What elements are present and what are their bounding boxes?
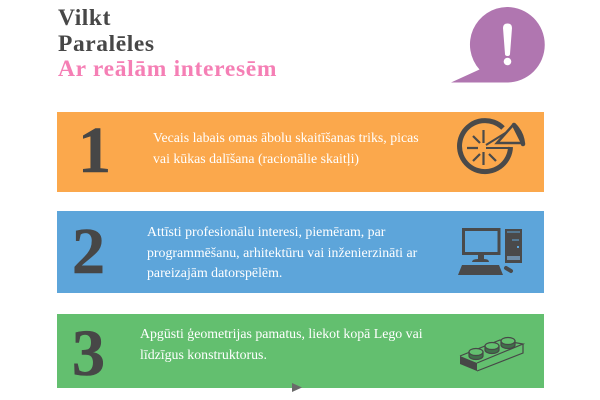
- icon: pizza: [457, 118, 526, 174]
- text: step 3 description: Apgūsti ģeometrijas pamatus, liekot kopā Lego vai: [140, 326, 423, 341]
- text: step 2 description: pareizajām datorspēlēm.: [147, 265, 282, 280]
- text: step 3 description: [140, 326, 423, 362]
- panel: step 1: [57, 112, 544, 192]
- number 1: 1: [78, 114, 111, 187]
- number 3: 3: [72, 317, 105, 390]
- text: step 2 description: Attīsti profesionālu interesi, piemēram, par: [147, 224, 385, 239]
- title: Paralēles: Paralēles: [58, 31, 155, 57]
- text: step 2 description: [147, 224, 418, 280]
- panel: step 3: [57, 314, 544, 388]
- text: step 2 description: programmēšanu, arhitektūru vai inženierzināti ar: [147, 244, 417, 260]
- icon: lego brick: [460, 336, 525, 372]
- panel: step 2: [57, 211, 544, 293]
- icon: desktop computer: [458, 228, 522, 275]
- subtitle: Ar reālām interesēm: Ar reālām interesēm: [58, 56, 277, 82]
- icon: small play arrow: [292, 383, 302, 392]
- text: step 1 description: Vecais labais omas ābolu skaitīšanas triks, picas: [153, 130, 419, 145]
- text: step 3 description: līdzīgus konstruktorus.: [140, 346, 267, 362]
- text: step 1 description: vai kūkas dalīšana (racionālie skaitļi): [153, 150, 359, 166]
- title: Vilkt: Vilkt: [58, 5, 111, 31]
- icon: speech bubble with exclamation mark: [451, 7, 545, 82]
- text: step 1 description: [153, 130, 419, 166]
- number 2: 2: [72, 215, 105, 288]
